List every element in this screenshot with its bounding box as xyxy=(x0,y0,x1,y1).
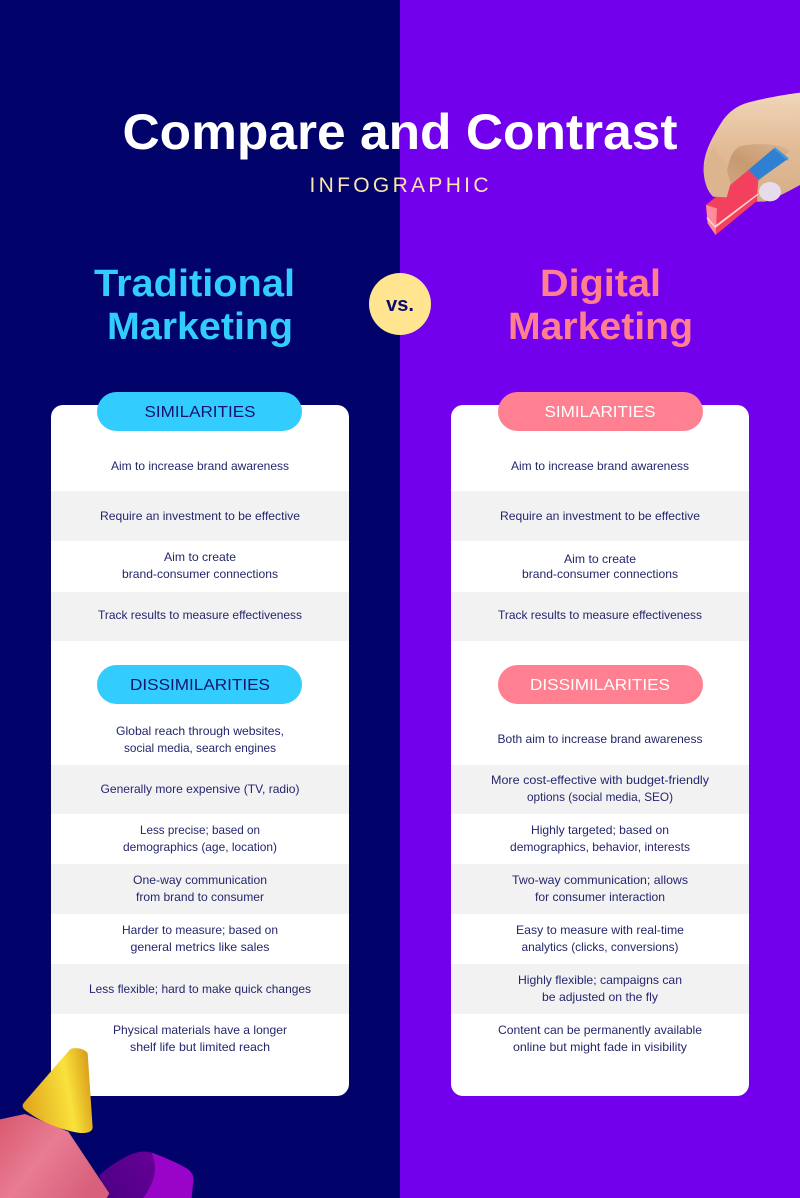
dissimilarities list: Highly targeted; based on xyxy=(531,823,669,837)
dissimilarities list: Content can be permanently available xyxy=(498,1023,702,1037)
heading: Digital Marketing xyxy=(508,263,693,348)
dissimilarities list: Generally more expensive (TV, radio) xyxy=(100,782,300,796)
dissimilarities list: options (social media, SEO) xyxy=(527,790,673,804)
subtitle: INFOGRAPHIC xyxy=(310,174,488,197)
dissimilarities list: from brand to consumer xyxy=(136,890,264,904)
dissimilarities list: Easy to measure with real-time xyxy=(516,923,684,937)
heading: Traditional Marketing: Traditional xyxy=(94,263,295,305)
background: right violet half xyxy=(400,0,800,1198)
dissimilarities list: online but might fade in visibility xyxy=(513,1040,687,1054)
dissimilarities list: Less flexible; hard to make quick changes xyxy=(89,982,311,996)
dissimilarities list: More cost-effective with budget-friendly xyxy=(491,773,709,787)
pill: similarities xyxy=(498,392,703,431)
heading: Digital Marketing: Marketing xyxy=(508,306,693,348)
shape: violet blob xyxy=(99,1152,193,1198)
dissimilarities list: Harder to measure; based on xyxy=(122,923,278,937)
background: left navy half xyxy=(0,0,400,1198)
dissimilarities list: Two-way communication; allows xyxy=(512,873,688,887)
dissimilarities list: Physical materials have a longer xyxy=(113,1023,287,1037)
heading: Digital Marketing: Digital xyxy=(540,263,661,305)
similarities list: Aim to increase brand awareness xyxy=(511,459,689,473)
pill: dissimilarities xyxy=(97,665,302,704)
dissimilarities list: One-way communication xyxy=(133,873,267,887)
dissimilarities list: Less precise; based on xyxy=(140,823,260,837)
similarities list: brand-consumer connections xyxy=(522,567,678,581)
pill: dissimilarities: DISSIMILARITIES xyxy=(530,677,670,694)
versus badge: vs. xyxy=(386,294,414,316)
dissimilarities list xyxy=(491,732,709,1054)
similarities list: Track results to measure effectiveness xyxy=(498,608,702,622)
heading: Traditional Marketing xyxy=(94,263,295,348)
decoration: 3D shapes bottom left xyxy=(0,1048,193,1198)
pill: similarities xyxy=(97,392,302,431)
similarities list: brand-consumer connections xyxy=(122,567,278,581)
title: Compare and Contrast xyxy=(122,104,678,160)
dissimilarities list: social media, search engines xyxy=(124,741,276,755)
similarities list: Require an investment to be effective xyxy=(500,509,700,523)
dissimilarities list: be adjusted on the fly xyxy=(542,990,658,1004)
similarities list: Aim to increase brand awareness xyxy=(111,459,289,473)
striped rows xyxy=(451,491,749,1014)
similarities list: Aim to create xyxy=(564,552,636,566)
similarities list: Aim to create xyxy=(164,550,236,564)
icon: hand holding eraser xyxy=(704,93,800,235)
pill: dissimilarities: DISSIMILARITIES xyxy=(130,677,270,694)
dissimilarities list: for consumer interaction xyxy=(535,890,665,904)
shape: yellow cone xyxy=(23,1048,93,1133)
dissimilarities list: Both aim to increase brand awareness xyxy=(498,732,702,746)
dissimilarities list xyxy=(89,724,311,1054)
panel: digital marketing xyxy=(451,392,749,1096)
dissimilarities list: analytics (clicks, conversions) xyxy=(522,940,679,954)
dissimilarities list: shelf life but limited reach xyxy=(130,1040,270,1054)
pill: dissimilarities xyxy=(498,665,703,704)
similarities list: Track results to measure effectiveness xyxy=(98,608,302,622)
similarities list xyxy=(98,459,302,622)
dissimilarities list: Global reach through websites, xyxy=(116,724,284,738)
similarities list: Require an investment to be effective xyxy=(100,509,300,523)
similarities list xyxy=(498,459,702,622)
dissimilarities list: demographics, behavior, interests xyxy=(510,840,690,854)
dissimilarities list: Highly flexible; campaigns can xyxy=(518,973,682,987)
dissimilarities list: demographics (age, location) xyxy=(123,840,277,854)
pill: similarities: SIMILARITIES xyxy=(144,404,256,421)
shape: pink cone xyxy=(0,1114,109,1198)
versus badge xyxy=(369,273,431,335)
heading: Traditional Marketing: Marketing xyxy=(107,306,293,348)
striped rows xyxy=(51,491,349,1014)
dissimilarities list: general metrics like sales xyxy=(130,940,270,954)
pill: similarities: SIMILARITIES xyxy=(544,404,656,421)
panel: traditional marketing xyxy=(51,392,349,1096)
